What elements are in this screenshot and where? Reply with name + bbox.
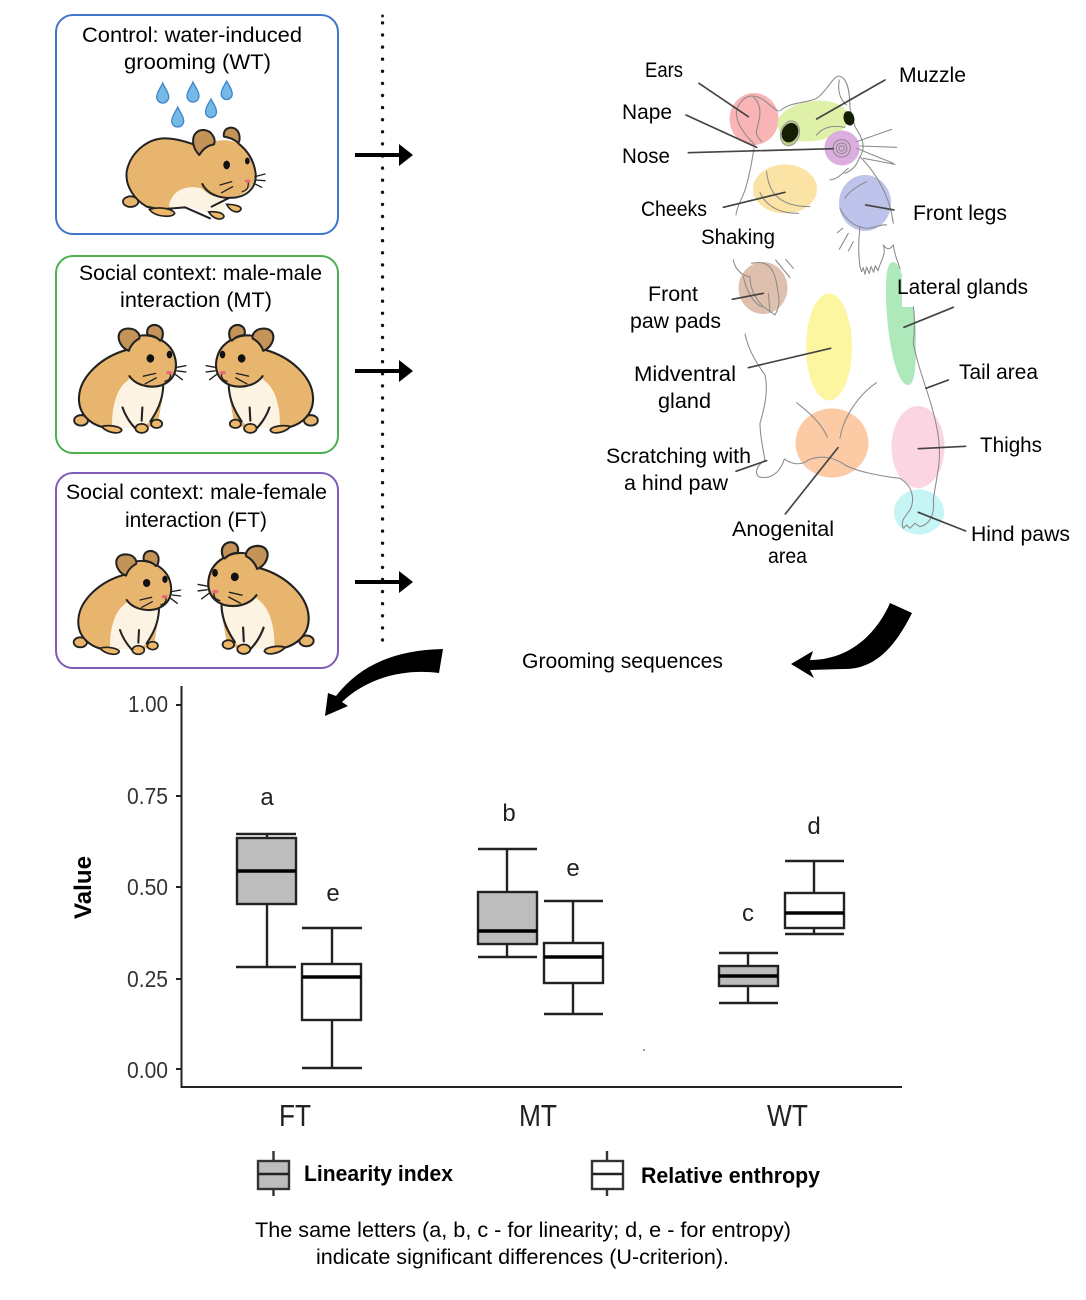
icon: male and female hamsters xyxy=(74,542,314,654)
significance letters: b xyxy=(502,800,516,827)
label: Ears: Ears xyxy=(645,59,683,82)
label: Scratching with a hind paw xyxy=(606,445,751,495)
label: Front paw pads: Front xyxy=(648,283,698,306)
leader lines xyxy=(686,80,894,299)
label: Thighs: Thighs xyxy=(980,434,1042,457)
label: Scratching with a hind paw: Scratching with xyxy=(606,445,751,468)
heading: male-female: Social context: male-female xyxy=(66,481,327,504)
label: Shaking: Shaking xyxy=(701,226,775,249)
legend: entropy label: Relative enthropy xyxy=(641,1163,821,1188)
box plot chart xyxy=(70,686,902,1133)
arrow: diagram to sequences xyxy=(791,603,912,678)
arrow: control to diagram xyxy=(355,144,413,166)
caption: The same letters (a, b, c - for linearity; d, e - for entropy) xyxy=(255,1219,791,1242)
icon: walking hamster xyxy=(123,128,265,219)
significance letters xyxy=(260,784,821,927)
y axis tick labels: 0.00 xyxy=(127,1057,168,1083)
label: Anogenital area: area xyxy=(768,545,807,568)
legend: linearity label: Linearity index xyxy=(304,1161,454,1186)
icon: two male hamsters xyxy=(74,325,318,433)
heading: control: grooming (WT) xyxy=(124,51,271,74)
label: Anogenital area xyxy=(732,518,834,568)
x axis labels: MT xyxy=(519,1098,557,1133)
panel: control water-induced grooming xyxy=(56,15,338,234)
heading: male-male: interaction (MT) xyxy=(120,289,272,312)
legend: entropy swatch xyxy=(592,1151,623,1196)
x axis labels: WT xyxy=(767,1098,808,1133)
label: Scratching with a hind paw: a hind paw xyxy=(624,472,729,495)
x axis labels xyxy=(279,1098,808,1133)
diagram: hamster body regions xyxy=(606,59,1070,568)
FT linearity box xyxy=(236,834,296,967)
arrow: male-male to diagram xyxy=(355,360,413,382)
axes xyxy=(176,686,902,1087)
sketch: upper body xyxy=(733,76,900,315)
sketch: lower body xyxy=(745,307,939,528)
label: Muzzle: Muzzle xyxy=(899,64,966,87)
label: Front paw pads xyxy=(630,283,721,333)
y axis tick labels: 0.25 xyxy=(127,966,168,992)
label: Cheeks: Cheeks xyxy=(641,198,707,221)
y axis tick labels: 1.00 xyxy=(128,691,168,717)
heading: control: Control: water-induced xyxy=(82,24,302,47)
label: Midventral gland xyxy=(634,363,736,413)
y axis title: Value xyxy=(70,856,97,919)
significance letters: e xyxy=(566,855,580,882)
significance letters: c xyxy=(742,900,754,927)
MT entropy box xyxy=(544,901,603,1014)
y axis tick labels xyxy=(127,691,168,1083)
significance letters: e xyxy=(326,880,340,907)
label: Midventral gland: Midventral xyxy=(634,363,736,386)
caption xyxy=(255,1219,791,1269)
y axis tick labels: 0.75 xyxy=(127,783,168,809)
legend xyxy=(258,1151,821,1196)
label: grooming sequences: Grooming sequences xyxy=(522,650,723,673)
label: Anogenital area: Anogenital xyxy=(732,518,834,541)
y axis tick labels: 0.50 xyxy=(127,874,168,900)
label: Hind paws: Hind paws xyxy=(971,523,1070,546)
panel: male-male interaction xyxy=(56,256,338,453)
heading: male-female xyxy=(66,481,327,532)
panel: male-female interaction xyxy=(56,473,338,668)
significance letters: d xyxy=(807,813,821,840)
caption: indicate significant differences (U-criterion). xyxy=(316,1246,729,1269)
heading: male-male xyxy=(79,262,322,312)
arrow: sequences to chart xyxy=(325,649,443,716)
legend: linearity swatch xyxy=(258,1151,289,1196)
WT linearity box xyxy=(719,953,778,1003)
FT entropy box xyxy=(302,928,362,1068)
label: Midventral gland: gland xyxy=(658,390,711,413)
x axis labels: FT xyxy=(279,1098,311,1133)
label: Nape: Nape xyxy=(622,101,672,124)
label: Front legs: Front legs xyxy=(913,202,1007,225)
label: Front paw pads: paw pads xyxy=(630,310,721,333)
region patches xyxy=(730,93,944,534)
MT linearity box xyxy=(478,849,537,957)
heading: male-female: interaction (FT) xyxy=(125,509,267,532)
label: Nose: Nose xyxy=(622,145,670,168)
heading: control xyxy=(82,24,302,74)
label: Tail area: Tail area xyxy=(959,361,1038,384)
significance letters: a xyxy=(260,784,274,811)
arrow: male-female to diagram xyxy=(355,571,413,593)
heading: male-male: Social context: male-male xyxy=(79,262,322,285)
icon: water drops xyxy=(157,81,232,127)
label: Lateral glands: Lateral glands xyxy=(897,276,1028,299)
WT entropy box xyxy=(785,861,844,934)
